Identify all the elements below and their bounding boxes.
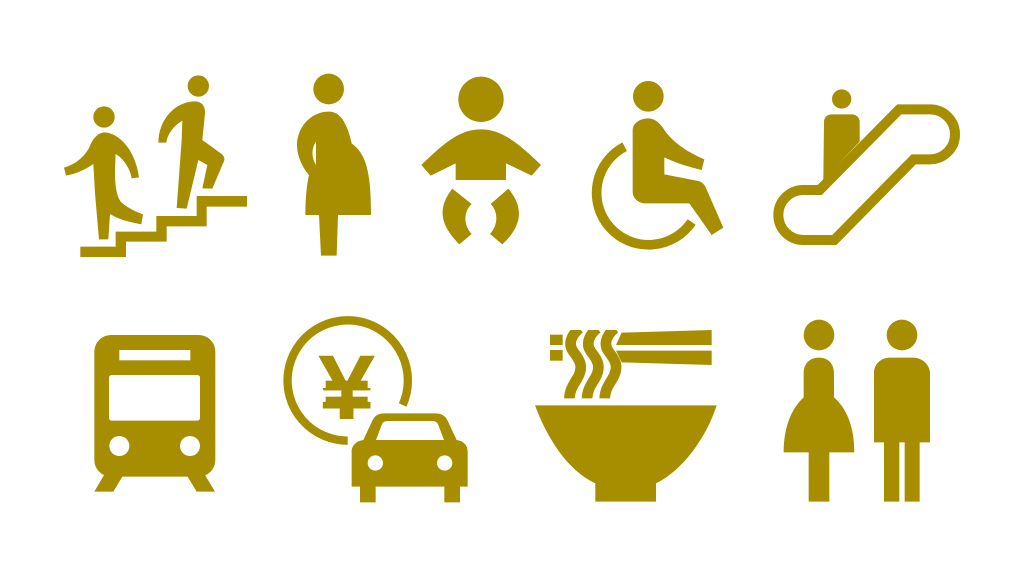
escalator band bbox=[778, 109, 955, 240]
car body bbox=[352, 413, 468, 502]
head bbox=[313, 74, 344, 104]
destination sign bbox=[119, 350, 190, 360]
person descending head bbox=[93, 106, 115, 128]
person ascending body bbox=[158, 101, 224, 209]
person descending body bbox=[64, 132, 143, 239]
right headlight bbox=[180, 436, 200, 456]
car right headlight bbox=[437, 455, 452, 471]
icon: pregnant woman bbox=[297, 74, 371, 256]
body bbox=[297, 112, 371, 256]
woman head bbox=[804, 320, 834, 350]
icon: wheelchair user bbox=[597, 81, 723, 245]
windshield bbox=[109, 375, 200, 421]
upper chopstick tip bbox=[550, 335, 563, 345]
train body bbox=[94, 335, 215, 477]
lower chopstick tip bbox=[550, 350, 563, 361]
right rail leg bbox=[187, 473, 215, 492]
torso and arms bbox=[421, 129, 541, 180]
left headlight bbox=[109, 436, 129, 456]
rider body bbox=[823, 114, 860, 180]
upper chopstick bbox=[616, 330, 712, 345]
seated body bbox=[633, 118, 723, 235]
coin ring bbox=[288, 320, 408, 441]
man head bbox=[887, 320, 917, 350]
person ascending head bbox=[188, 75, 209, 97]
diaper left bbox=[443, 189, 472, 244]
head bbox=[458, 77, 504, 122]
icon: people on stairs bbox=[64, 75, 247, 257]
staircase bbox=[80, 196, 247, 257]
icon: restroom woman and man bbox=[784, 320, 930, 502]
icon: train bbox=[94, 335, 215, 492]
diaper right bbox=[490, 189, 519, 244]
lower chopstick bbox=[616, 351, 712, 365]
head bbox=[633, 81, 664, 112]
icon: baby bbox=[421, 77, 541, 244]
noodles bbox=[569, 328, 616, 400]
bowl bbox=[535, 405, 717, 502]
yen sign: ¥ bbox=[318, 335, 375, 439]
pictogram grid bbox=[64, 74, 960, 502]
left rail leg bbox=[94, 473, 123, 492]
rider head bbox=[832, 89, 851, 109]
icon: paid parking yen and car bbox=[288, 320, 468, 502]
man body bbox=[874, 358, 930, 502]
icon: escalator bbox=[778, 89, 955, 240]
car left headlight bbox=[368, 455, 383, 471]
woman body bbox=[784, 358, 854, 502]
icon: noodle bowl bbox=[535, 328, 717, 502]
wheel bbox=[597, 147, 692, 245]
